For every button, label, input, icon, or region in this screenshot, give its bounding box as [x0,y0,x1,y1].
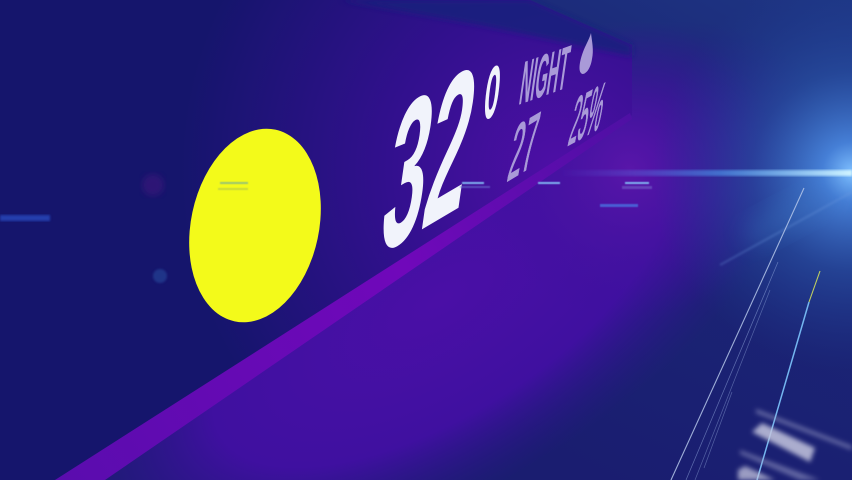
panel top edge band [340,0,632,56]
blurred light smears [738,409,852,480]
light streak dashes [0,174,652,283]
thin white light lines [671,188,804,480]
temperature 32: 32 [371,17,488,301]
blue and yellow light line [757,271,820,480]
horizontal light streak [560,170,852,176]
icon: water drop [580,33,593,74]
diagonal flare ray [720,192,852,265]
right purple glow [480,20,780,320]
lens flare glow [652,0,852,372]
icon: sun disc [172,116,338,335]
secondary flare glow [738,177,842,253]
label NIGHT: NIGHT [516,31,574,119]
humidity 25%: 25% [564,67,611,161]
upper panel [0,0,632,480]
purple stripe [55,113,632,480]
degree mark: o [480,27,507,144]
low temperature 27: 27 [503,95,545,199]
